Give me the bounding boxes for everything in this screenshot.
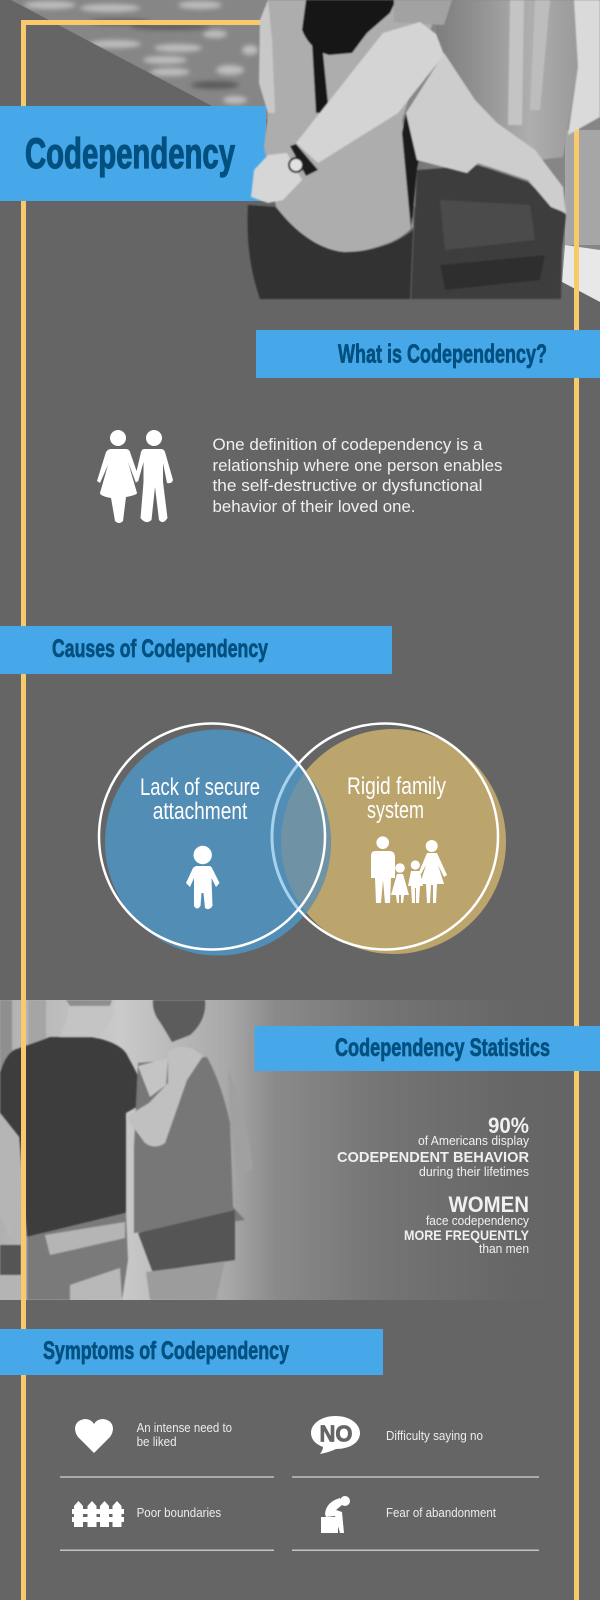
symptom: poor boundaries: Poor boundaries [137,1506,221,1520]
stat: women: WOMEN [448,1192,529,1217]
top photo: embracing couple [248,0,600,299]
symptom: need to be liked [75,1419,232,1453]
icon: family [371,836,447,903]
title: Codependency [25,130,235,178]
stat: 90 percent [337,1113,530,1179]
stat: women: MORE FREQUENTLY [404,1227,530,1243]
symptom: need to be liked: be liked [137,1435,177,1449]
icon: speech bubble NO: NO [320,1420,352,1446]
icon: child [186,846,220,909]
definition text: the self-destructive or dysfunctional [212,477,482,495]
stat: women [404,1192,530,1256]
heading: causes: Causes of Codependency [52,635,268,663]
cause: lack of secure attachment: Lack of secure [140,774,260,801]
stat: 90 percent: during their lifetimes [419,1165,529,1179]
heading: symptoms: Symptoms of Codependency [43,1337,289,1365]
icon: speech bubble NO [311,1416,360,1454]
symptom: fear of abandonment [321,1496,496,1533]
stat: women: than men [479,1242,529,1256]
cause: rigid family system [347,773,446,824]
symptom: poor boundaries [72,1501,221,1527]
icon: couple holding hands [97,430,173,523]
icon: fence [72,1501,124,1527]
definition text: One definition of codependency is a [212,436,483,454]
section bar: symptoms [0,1329,383,1375]
cause: rigid family system: system [367,797,424,824]
definition text [212,436,502,516]
divider row 1 [60,1476,539,1478]
definition text: relationship where one person enables [212,457,502,475]
venn diagram [99,724,506,956]
bottom photo: couple walking [0,1000,451,1300]
symptom: need to be liked: An intense need to [137,1421,232,1435]
top background water photo [0,0,600,310]
section bar: causes [0,626,392,674]
icon: sitting figure [321,1496,350,1533]
stat: 90 percent: CODEPENDENT BEHAVIOR [337,1149,529,1166]
symptom: difficulty saying no: Difficulty saying no [386,1429,483,1443]
symptom: difficulty saying no [311,1416,483,1454]
title banner [0,106,266,201]
stat: women: face codependency [426,1214,530,1228]
icon: heart [75,1419,113,1453]
cause: rigid family system: Rigid family [347,773,446,800]
definition text: behavior of their loved one. [212,498,416,516]
divider row 2 [60,1550,539,1551]
symptom: fear of abandonment: Fear of abandonment [386,1506,496,1520]
stat: 90 percent: 90% [488,1113,529,1138]
section bar: what is codependency [256,330,600,378]
section bar: statistics [254,1026,600,1071]
cause: lack of secure attachment: attachment [153,798,248,825]
stat: 90 percent: of Americans display [418,1134,530,1148]
cause: lack of secure attachment [140,774,260,825]
